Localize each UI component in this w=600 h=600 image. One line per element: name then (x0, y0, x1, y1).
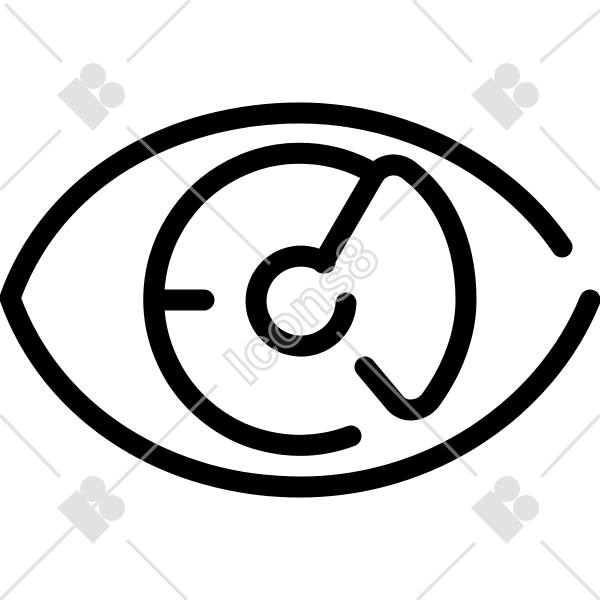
iris tick (158, 290, 204, 310)
watermark: logo bottom right (471, 476, 539, 544)
iris arc (154, 153, 373, 445)
watermark: logo top right (471, 63, 539, 131)
eye outline (10, 113, 590, 487)
watermark: logo top left (57, 63, 125, 131)
watermark: logo bottom left (57, 476, 125, 544)
lens contour (323, 165, 466, 410)
pupil (256, 256, 346, 346)
watermark: Icons8 text: Icons8 (213, 224, 391, 397)
icon: eye (10, 113, 590, 487)
